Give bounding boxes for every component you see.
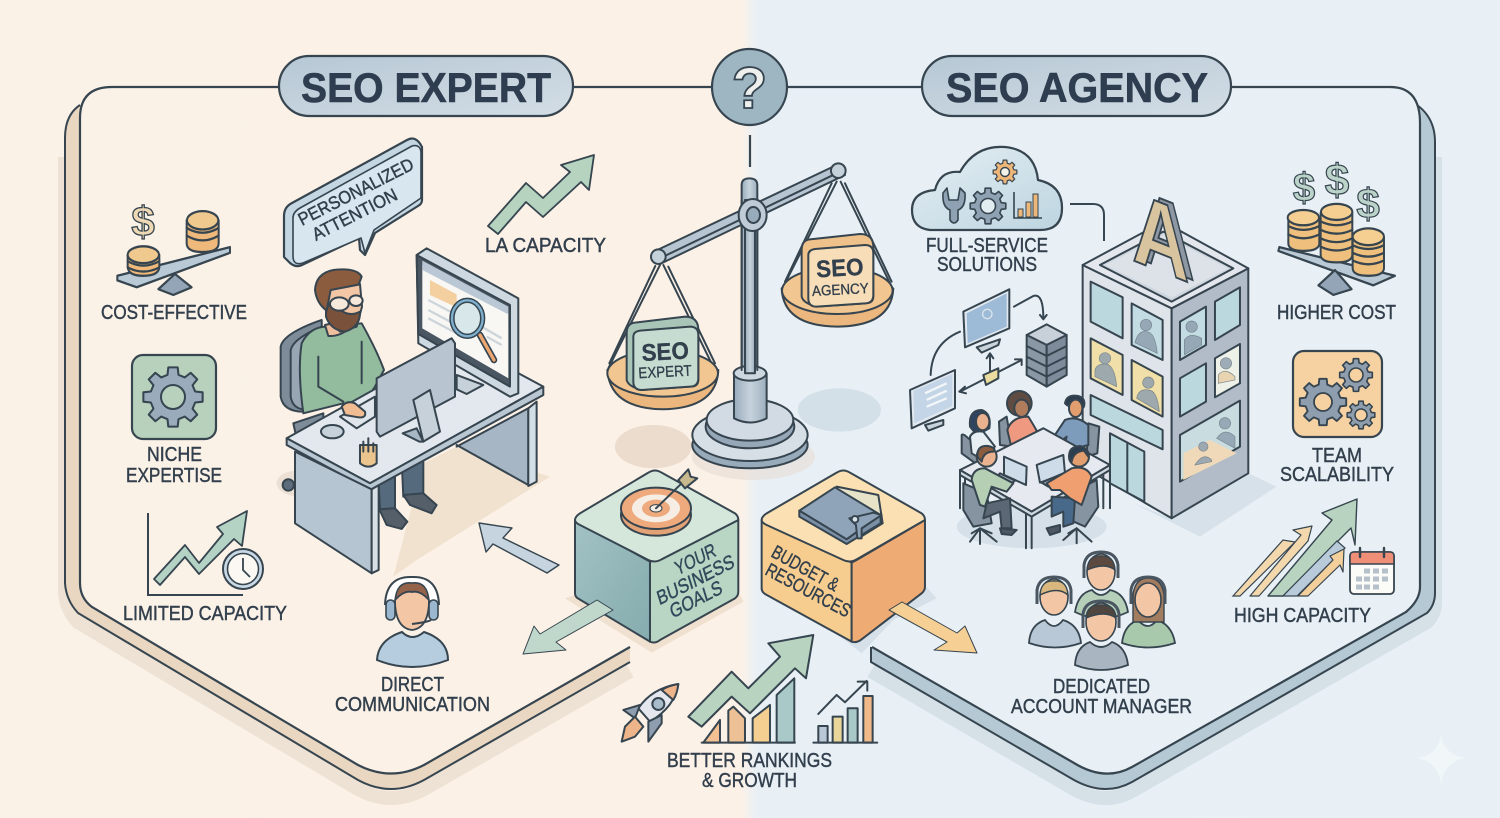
item: cost-effective: $ bbox=[131, 198, 155, 245]
item: higher cost: $ bbox=[1325, 156, 1349, 205]
item: team scalability: SCALABILITY bbox=[1280, 464, 1394, 486]
item: niche expertise bbox=[126, 355, 222, 487]
illustration: balance scale: SEO bbox=[641, 338, 690, 367]
item: cost-effective: COST-EFFECTIVE bbox=[101, 302, 247, 324]
cube: budget and resources: BUDGET & bbox=[768, 542, 843, 596]
item: high capacity bbox=[1233, 499, 1394, 627]
callout: personalized attention bbox=[284, 139, 422, 266]
connector lines between headings bbox=[573, 87, 922, 167]
arrow: up-left toward expert bbox=[479, 523, 559, 573]
illustration: team meeting bbox=[957, 391, 1110, 548]
callout: personalized attention: PERSONALIZED bbox=[295, 154, 417, 230]
cube: your business goals bbox=[565, 469, 743, 653]
item: high capacity: HIGH CAPACITY bbox=[1234, 605, 1371, 627]
icon: question mark bbox=[712, 49, 787, 125]
item: LA capacity: LA CAPACITY bbox=[485, 235, 606, 257]
title: SEO agency: SEO AGENCY bbox=[946, 64, 1208, 111]
arrow: orange to agency bbox=[889, 602, 977, 653]
item: limited capacity: LIMITED CAPACITY bbox=[123, 603, 287, 625]
panel: SEO expert frame bbox=[65, 87, 630, 798]
illustration: agency building: A bbox=[1138, 168, 1195, 302]
item: higher cost bbox=[1277, 156, 1396, 324]
cube: your business goals: GOALS bbox=[667, 576, 725, 623]
panel: SEO agency frame bbox=[871, 87, 1435, 798]
icon: question mark: ? bbox=[732, 56, 767, 121]
item: higher cost: HIGHER COST bbox=[1277, 302, 1396, 324]
illustration: expert at desk bbox=[277, 248, 550, 577]
item: cost-effective bbox=[101, 198, 247, 324]
item: better rankings and growth bbox=[622, 635, 877, 792]
title: SEO expert: SEO EXPERT bbox=[301, 64, 551, 111]
illustration: agency building: A bbox=[1132, 170, 1189, 304]
arrow: green to expert bbox=[523, 600, 613, 654]
illustration: balance scale bbox=[607, 163, 893, 480]
item: dedicated account manager bbox=[1011, 552, 1192, 718]
illustration: balance scale: SEO bbox=[816, 254, 864, 283]
item: niche expertise: NICHE bbox=[147, 444, 202, 466]
cube: your business goals: BUSINESS bbox=[654, 550, 737, 610]
cube: your business goals: YOUR bbox=[672, 539, 719, 580]
item: better rankings and growth: BETTER RANKINGS bbox=[667, 750, 832, 772]
cube: budget and resources: RESOURCES bbox=[762, 560, 854, 622]
item: LA capacity bbox=[485, 155, 606, 257]
item: full-service solutions: SOLUTIONS bbox=[937, 254, 1037, 276]
item: dedicated account manager: DEDICATED bbox=[1053, 676, 1150, 698]
item: direct communication: COMMUNICATION bbox=[335, 694, 490, 716]
item: direct communication bbox=[335, 577, 490, 716]
illustration: network of computers bbox=[910, 289, 1067, 431]
item: full-service solutions bbox=[912, 147, 1104, 276]
icon: sparkle watermark bbox=[1417, 735, 1465, 784]
illustration: agency building bbox=[1083, 168, 1277, 537]
item: team scalability bbox=[1280, 351, 1394, 486]
item: niche expertise: EXPERTISE bbox=[126, 465, 222, 487]
item: dedicated account manager: ACCOUNT MANAGER bbox=[1011, 696, 1192, 718]
item: higher cost: $ bbox=[1356, 180, 1380, 227]
item: better rankings and growth: & GROWTH bbox=[702, 770, 797, 792]
item: direct communication: DIRECT bbox=[381, 674, 444, 696]
illustration: balance scale: AGENCY bbox=[812, 281, 869, 300]
item: full-service solutions: FULL-SERVICE bbox=[926, 235, 1048, 257]
item: team scalability: TEAM bbox=[1312, 445, 1362, 467]
item: limited capacity bbox=[123, 511, 287, 625]
illustration: balance scale: EXPERT bbox=[638, 363, 693, 382]
item: higher cost: $ bbox=[1293, 166, 1315, 210]
cube: budget and resources bbox=[762, 470, 937, 653]
callout: personalized attention: ATTENTION bbox=[309, 185, 401, 245]
